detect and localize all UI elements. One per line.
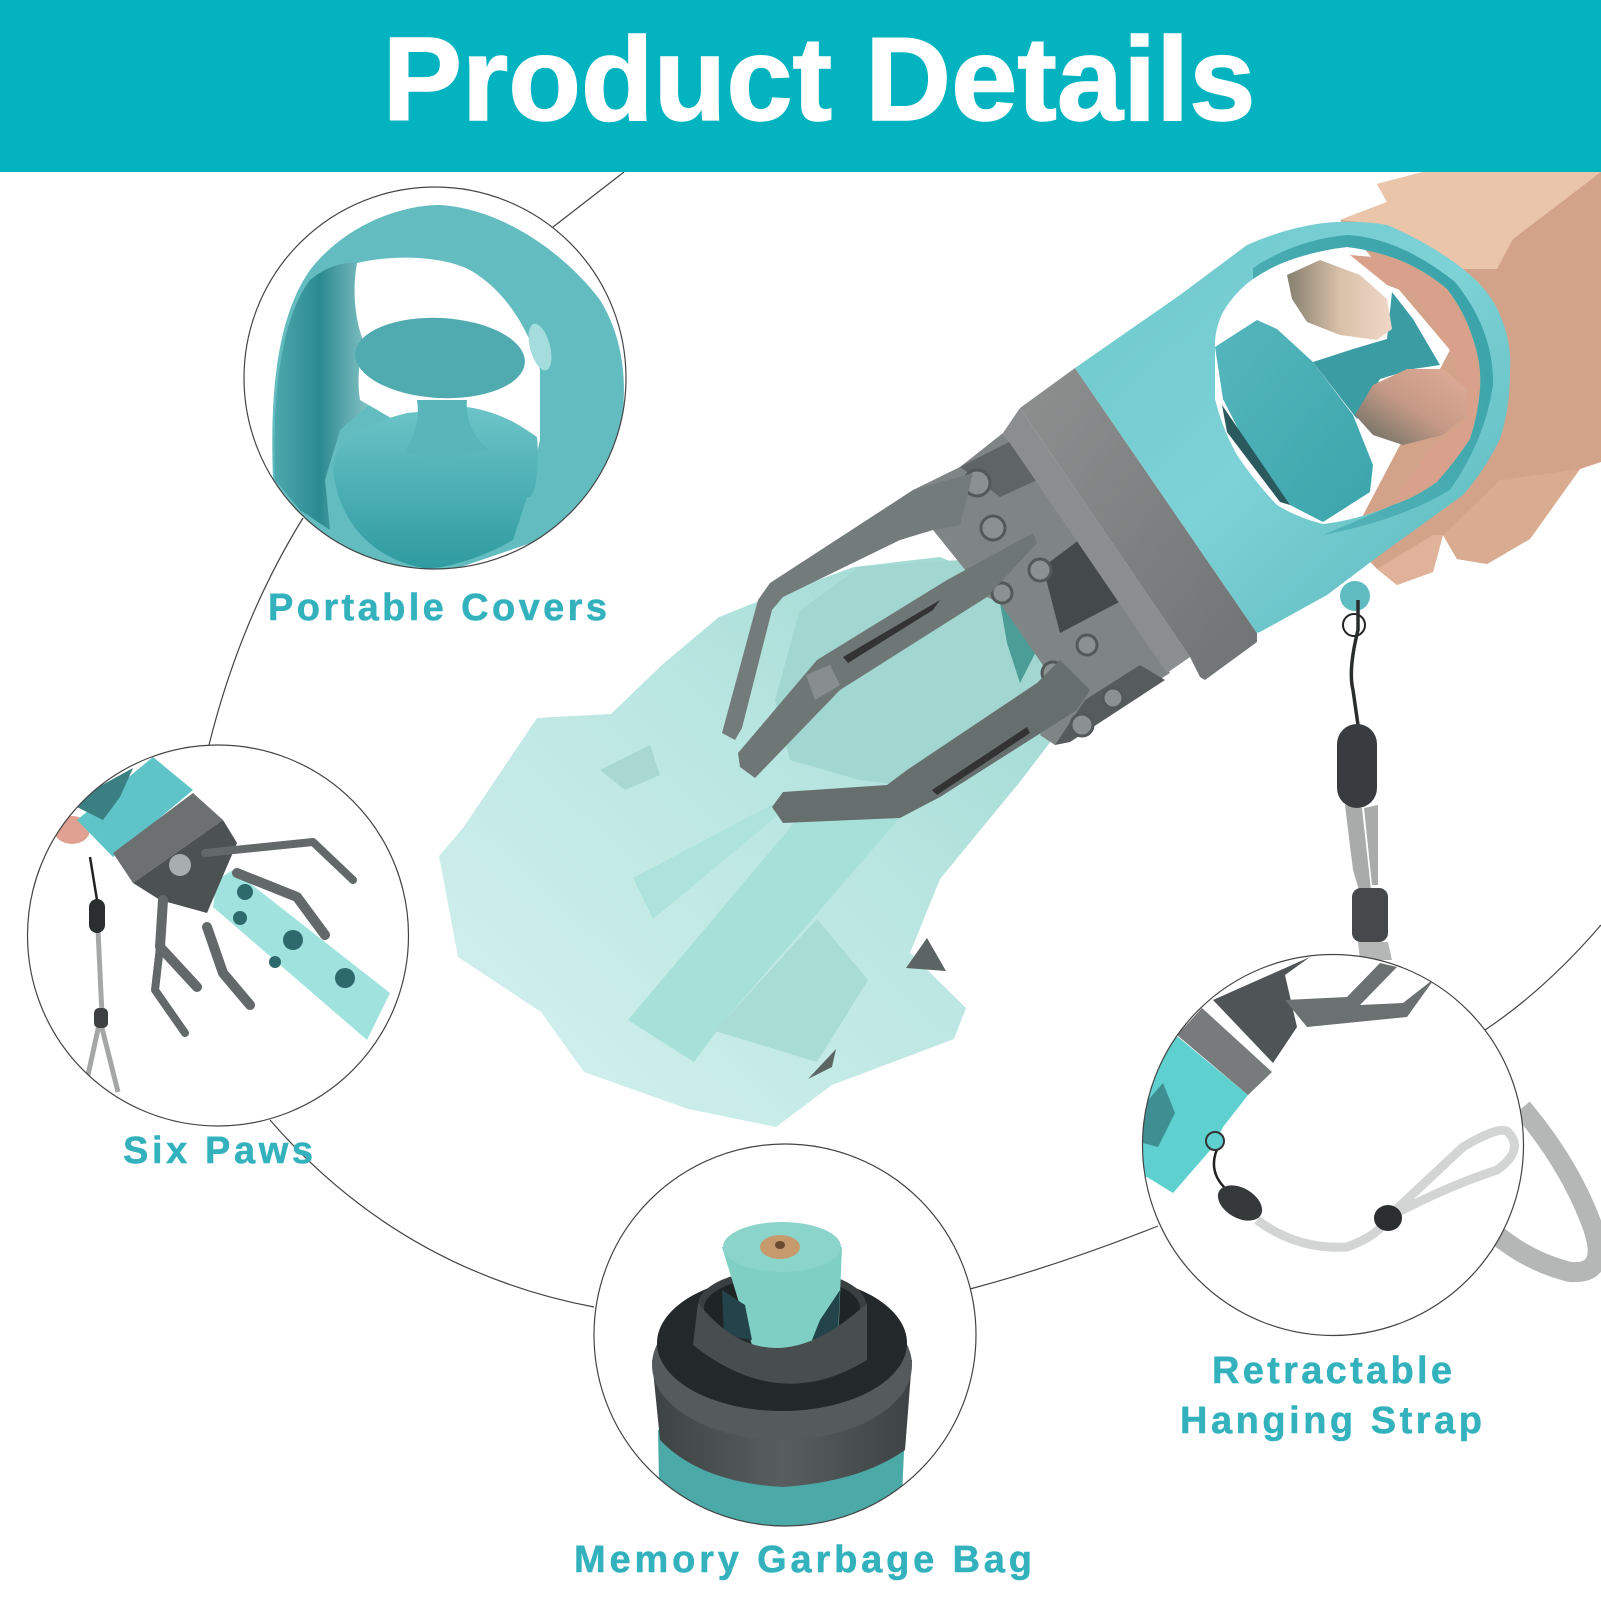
panel: memory garbage bag circle xyxy=(594,1144,976,1540)
label: retractable hanging strap xyxy=(1180,1350,1482,1442)
knob disc xyxy=(1215,320,1373,522)
ring inner left shade xyxy=(274,263,375,530)
header bar xyxy=(0,0,1601,172)
printed bag xyxy=(213,870,390,1040)
teal body with ring handle xyxy=(1075,222,1510,633)
claws xyxy=(1285,963,1435,1027)
ring handle xyxy=(272,205,624,580)
mechanism block xyxy=(913,433,1170,745)
band xyxy=(113,793,223,883)
hand xyxy=(1340,172,1601,585)
strap loop xyxy=(1257,1130,1514,1247)
main product illustration xyxy=(439,172,1601,1127)
handle opening xyxy=(1142,1083,1175,1147)
finger xyxy=(54,816,90,844)
lanyard xyxy=(90,857,97,900)
claws xyxy=(155,842,353,1033)
pivots xyxy=(919,470,1123,736)
label: portable covers: Portable Covers xyxy=(268,587,607,629)
bead xyxy=(1374,1205,1402,1231)
ring highlight xyxy=(528,324,552,370)
inner ring back xyxy=(698,1276,866,1310)
gray band xyxy=(1177,1008,1272,1095)
connector arc lines xyxy=(209,172,1601,1307)
claw: center xyxy=(738,533,1037,778)
slider xyxy=(1218,1185,1262,1221)
bag xyxy=(439,557,1058,1127)
panel: retractable hanging strap circle xyxy=(1130,954,1524,1336)
label: retractable hanging strap: Retractable xyxy=(1212,1350,1452,1392)
label: memory garbage bag: Memory Garbage Bag xyxy=(574,1539,1032,1581)
small dark claw tips under bag xyxy=(808,938,946,1079)
crescent shadow xyxy=(1222,405,1290,505)
bag roll xyxy=(722,1247,842,1352)
mechanism xyxy=(1213,957,1310,1063)
claw: upper xyxy=(722,473,973,740)
palm seen through ring xyxy=(1350,255,1480,502)
label: six paws: Six Paws xyxy=(123,1130,313,1172)
opening xyxy=(354,258,540,450)
collar xyxy=(1003,408,1190,673)
strap loop behind retractable circle xyxy=(1498,1108,1598,1272)
knob stem xyxy=(1313,292,1440,419)
body xyxy=(77,757,193,857)
claw: lower xyxy=(772,660,1090,823)
tab xyxy=(1206,1132,1224,1150)
rim xyxy=(652,1344,912,1434)
teal body xyxy=(1143,1036,1248,1193)
inner ring front xyxy=(693,1303,867,1384)
gray band xyxy=(1020,368,1257,680)
ring inner bevel xyxy=(1253,235,1493,535)
thumb xyxy=(1287,260,1392,340)
label: retractable hanging strap: Hanging Strap xyxy=(1180,1400,1482,1442)
dark lower body xyxy=(652,1360,912,1487)
knob stem xyxy=(412,400,477,438)
lanyard xyxy=(1337,581,1392,960)
panel: portable covers circle xyxy=(244,187,626,580)
knob top xyxy=(355,318,525,398)
knob base xyxy=(333,407,538,568)
finger xyxy=(1355,369,1467,445)
teal base xyxy=(658,1430,904,1526)
panel: six paws circle xyxy=(28,745,408,1126)
mechanism xyxy=(133,820,237,913)
cord xyxy=(1212,1150,1226,1188)
title: Product Details xyxy=(383,13,1255,146)
inner cavity xyxy=(657,1275,907,1411)
